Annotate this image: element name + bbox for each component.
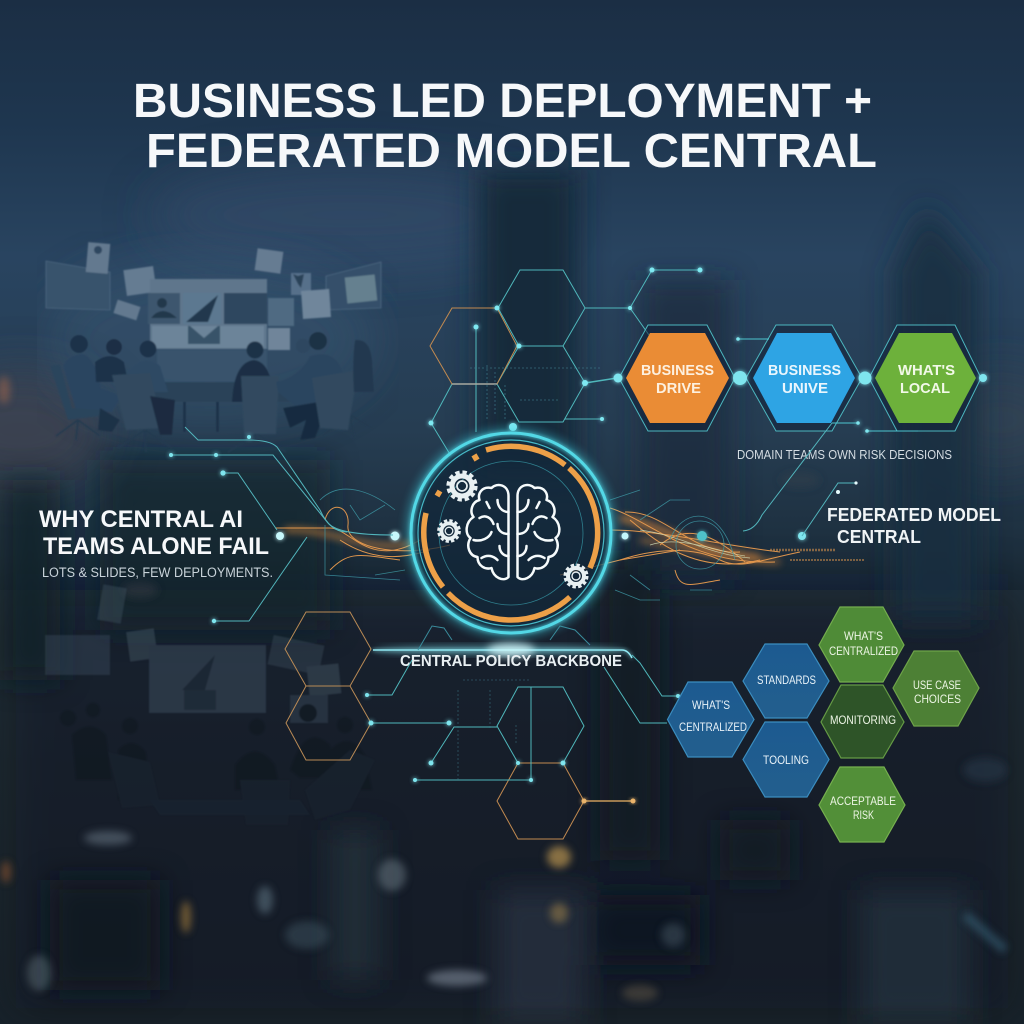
why central AI teams alone fail heading: WHY CENTRAL AI <box>39 506 243 533</box>
hexagon: what's centralized: WHAT'S <box>692 698 730 712</box>
hexagon: what's local: LOCAL <box>900 380 950 397</box>
brain icon <box>467 485 559 579</box>
hexagon: business unive: UNIVE <box>782 380 828 397</box>
federated model central label: CENTRAL <box>837 527 921 547</box>
subtext: slides: LOTS & SLIDES, FEW DEPLOYMENTS. <box>42 565 273 580</box>
wireframe hexagon network: bottom <box>285 612 680 839</box>
hexagon cluster: what's centralized (blue) <box>668 644 829 797</box>
hexagon: standards <box>743 644 829 718</box>
hexagon: use case choices: CHOICES <box>914 692 961 706</box>
hexagon: what's centralized green <box>819 607 904 682</box>
wireframe hexagon network: top <box>428 268 702 456</box>
hexagon: what's centralized green: WHAT'S <box>844 629 883 643</box>
hexagon: use case choices <box>893 651 979 726</box>
hexagon: standards: STANDARDS <box>757 673 816 687</box>
title: BUSINESS LED DEPLOYMENT + <box>133 75 872 128</box>
why central AI teams alone fail heading: TEAMS ALONE FAIL <box>43 533 269 560</box>
hexagon: monitoring <box>821 685 904 758</box>
energy streams through the hub <box>275 489 865 600</box>
title: FEDERATED MODEL CENTRAL <box>146 125 877 178</box>
hexagon: what's local <box>869 325 981 431</box>
hexagon: tooling <box>743 722 829 797</box>
circuit connectors: left <box>169 427 393 623</box>
connector nodes between top hexagons <box>614 337 987 433</box>
circuit connectors: right <box>743 423 858 536</box>
federated model central label: FEDERATED MODEL <box>827 505 1001 525</box>
hexagon: tooling: TOOLING <box>763 753 809 767</box>
gear icons <box>439 473 586 586</box>
federated model central label <box>827 505 1001 547</box>
why central AI teams alone fail heading <box>39 506 269 560</box>
people around the table <box>50 332 374 452</box>
central policy backbone label <box>373 626 632 670</box>
hexagon: monitoring: MONITORING <box>830 713 896 727</box>
hexagon: business unive: BUSINESS <box>768 362 841 379</box>
hexagon: use case choices: USE CASE <box>913 678 961 692</box>
hexagon: business unive <box>746 325 862 431</box>
hexagon: what's centralized <box>668 682 754 757</box>
orange ring segments <box>424 446 598 620</box>
central policy backbone label: CENTRAL POLICY BACKBONE <box>400 653 622 670</box>
hexagon: business drive: BUSINESS <box>641 362 714 379</box>
hexagon: acceptable risk <box>819 767 905 842</box>
hexagon: what's local: WHAT'S <box>898 362 955 379</box>
hexagon cluster: what's local (green) <box>819 607 979 842</box>
hexagon: acceptable risk: RISK <box>853 808 874 822</box>
title <box>133 75 877 178</box>
seated person left <box>50 335 122 420</box>
illustration: meeting reflection with slides (lower) <box>45 584 375 825</box>
hexagon: business drive <box>619 325 735 431</box>
caption: domain teams: DOMAIN TEAMS OWN RISK DECISIONS <box>737 448 952 462</box>
illustration: central AI team meeting with slides (upper) <box>40 242 381 452</box>
hexagon: what's centralized: CENTRALIZED <box>679 720 747 734</box>
hexagon: business drive: DRIVE <box>656 380 701 397</box>
central hub: AI brain ring <box>409 431 613 635</box>
hexagon: acceptable risk: ACCEPTABLE <box>830 794 896 808</box>
hexagon: what's centralized green: CENTRALIZED <box>829 644 898 658</box>
blurred city lights <box>0 376 1007 1001</box>
